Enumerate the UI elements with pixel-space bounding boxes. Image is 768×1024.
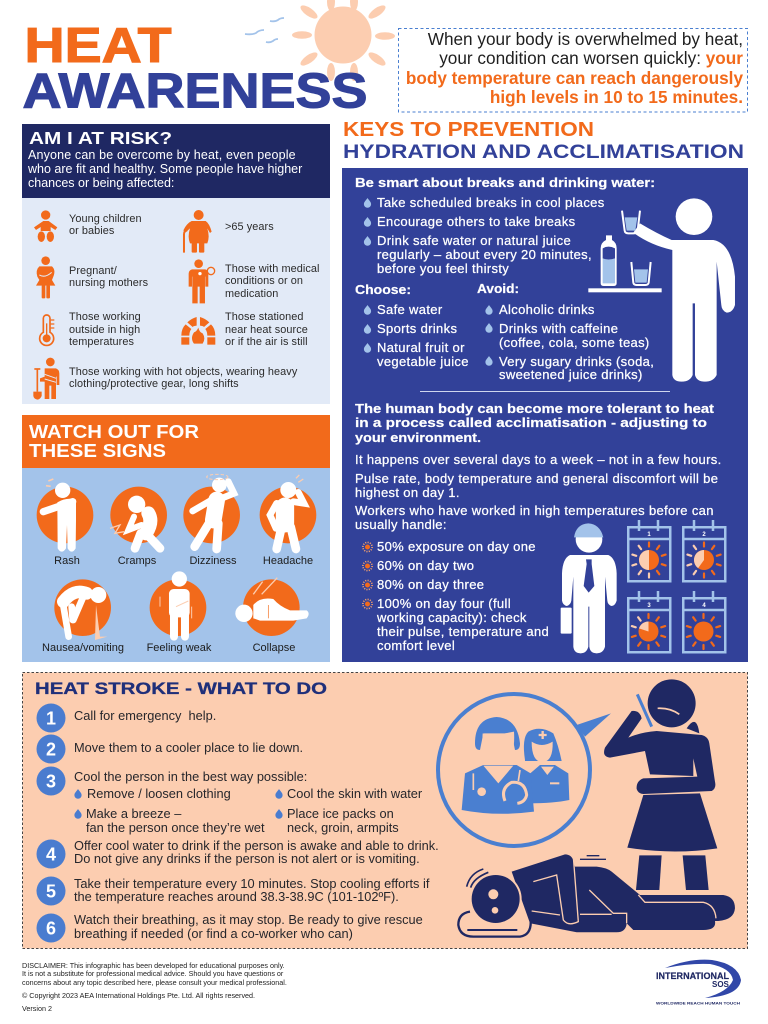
steps text xyxy=(74,708,439,941)
list: exposure by day: their pulse, temperature and xyxy=(377,624,549,639)
callout: When your body is overwhelmed by heat, xyxy=(428,29,743,49)
panel: am I at risk xyxy=(22,124,330,404)
text: age groups: or babies xyxy=(69,225,115,237)
list: breaks and water: Encourage others to take breaks xyxy=(377,214,576,229)
text: outside and heat source: Those working xyxy=(69,311,141,323)
list: exposure by day: 60% on day two xyxy=(377,558,474,573)
sign: collapse xyxy=(235,578,309,654)
sign: collapse: Collapse xyxy=(253,642,295,654)
list: choose: Sports drinks xyxy=(377,321,457,336)
logo: International SOS: INTERNATIONAL xyxy=(656,971,730,981)
icon: thermometer xyxy=(40,315,54,345)
text: acclimatisation: The human body can become more tolerant to heat xyxy=(355,402,715,416)
sign: dizziness: Dizziness xyxy=(189,555,237,567)
sign: nausea: Nausea/vomiting xyxy=(42,642,124,654)
sign: cramps: Cramps xyxy=(118,555,157,567)
text: outside and heat source xyxy=(69,311,308,348)
panel: heat stroke xyxy=(22,672,748,948)
text: risk intro: Anyone can be overcome by heat, even people xyxy=(28,148,296,162)
heading: watch out xyxy=(29,422,199,461)
calendar: day 2 xyxy=(683,520,725,581)
icon: nursing mother xyxy=(36,256,55,298)
icon: birds xyxy=(245,18,284,42)
steps text: fan the person once they’re wet xyxy=(86,820,265,835)
list: avoid: Alcoholic drinks xyxy=(499,302,595,317)
text: risk intro: who are fit and healthy. Some people have higher xyxy=(27,162,302,176)
disclaimer: © Copyright 2023 AEA International Holdings Pte. Ltd. All rights reserved. xyxy=(22,991,255,1000)
disclaimer: Version 2 xyxy=(22,1004,52,1013)
panel: watch out for signs xyxy=(22,415,330,662)
heading: watch out: THESE SIGNS xyxy=(29,441,166,461)
text: pregnant and medical conditions xyxy=(69,263,319,300)
icon: man drinking water xyxy=(588,198,735,382)
illustration: collapsed person xyxy=(458,854,735,937)
calendar: day 1: 1 xyxy=(647,532,651,538)
heading: am I at risk: AM I AT RISK? xyxy=(29,128,172,148)
list: choose: Safe water xyxy=(377,302,443,317)
calendar: day 3 xyxy=(628,591,670,652)
list: breaks and water: regularly – about every 20 minutes, xyxy=(377,247,592,262)
calendar: day 4: 4 xyxy=(702,603,706,609)
sign: dizziness xyxy=(183,474,240,567)
step numbers: 6 xyxy=(46,918,56,938)
text: acclimatisation: in a process called acclimatisation - adjusting to xyxy=(355,416,707,430)
steps text: Remove / loosen clothing xyxy=(87,786,231,801)
text: hot objects: clothing/protective gear, long shifts xyxy=(69,378,239,390)
steps text: breathing if needed (or find a co-worker who can) xyxy=(74,926,353,941)
list: avoid: Drinks with caffeine xyxy=(499,321,618,336)
title: HEAT xyxy=(24,19,172,73)
sign: nausea xyxy=(42,579,124,654)
list: choose: vegetable juice xyxy=(377,354,469,369)
list: avoid: Avoid: xyxy=(477,282,519,296)
sign: rash xyxy=(37,479,93,567)
text: acclimatisation details: highest on day 1. xyxy=(355,485,460,500)
steps text: Do not give any drinks if the person is not alert or is vomiting. xyxy=(74,851,420,866)
list: exposure by day: comfort level xyxy=(377,638,455,653)
callout: body temperature can reach dangerously xyxy=(406,68,743,88)
sign: cramps xyxy=(110,487,167,567)
text: pregnant and medical conditions: medication xyxy=(225,288,278,300)
steps text: Cool the skin with water xyxy=(287,786,423,801)
step numbers: 4 xyxy=(46,844,56,864)
list: avoid: sweetened juice drinks) xyxy=(499,367,643,382)
illustration: speech bubble with medics xyxy=(438,694,611,846)
text: hot objects xyxy=(69,366,298,390)
text: pregnant and medical conditions: nursing mothers xyxy=(69,277,149,289)
text: age groups: >65 years xyxy=(225,221,274,233)
list: breaks and water: Take scheduled breaks in cool places xyxy=(377,195,605,210)
list: avoid xyxy=(477,282,654,382)
steps text: Take their temperature every 10 minutes. Stop cooling efforts if xyxy=(74,876,430,891)
bullets: cooling xyxy=(74,789,283,819)
list: exposure by day: working capacity): check xyxy=(376,610,527,625)
step numbers: 1 xyxy=(46,708,56,728)
sign: headache xyxy=(260,475,316,567)
text: age groups xyxy=(69,213,274,237)
steps text: Cool the person in the best way possible: xyxy=(74,769,307,784)
list: avoid: Very sugary drinks (soda, xyxy=(499,354,654,369)
list: choose xyxy=(355,283,469,369)
icon: person with medical condition xyxy=(189,259,215,303)
sign: headache: Headache xyxy=(263,555,313,567)
calendar: day 2: 2 xyxy=(702,532,706,538)
text: risk intro: chances or being affected: xyxy=(28,176,174,190)
logo: International SOS: SOS xyxy=(712,980,730,989)
text: acclimatisation details: It happens over several days to a week – not in a few hours. xyxy=(355,452,722,467)
sign: feeling weak xyxy=(147,571,212,654)
heading: watch out: WATCH OUT FOR xyxy=(29,422,199,442)
text: outside and heat source: temperatures xyxy=(69,336,134,348)
step numbers: 2 xyxy=(46,740,56,760)
title xyxy=(22,19,368,118)
list: avoid: (coffee, cola, some teas) xyxy=(499,335,650,350)
heading: keys to prevention: KEYS TO PREVENTION xyxy=(343,119,594,141)
icon: elderly person xyxy=(183,210,212,253)
list: exposure by day: 50% exposure on day one xyxy=(377,539,536,554)
list: breaks and water xyxy=(364,195,605,276)
logo: International SOS: WORLDWIDE REACH HUMAN TOUCH xyxy=(656,1002,740,1006)
icon: worker with helmet xyxy=(561,523,617,653)
text: acclimatisation details: Workers who have worked in high temperatures before can xyxy=(355,503,714,518)
steps text: the temperature reaches around 38.3-38.9C (101-102ºF). xyxy=(74,889,399,904)
text: acclimatisation details: Pulse rate, body temperature and general discomfort will be xyxy=(355,471,718,486)
logo: International SOS xyxy=(656,960,741,1006)
callout: your condition can worsen quickly: your xyxy=(439,48,743,68)
step numbers: 5 xyxy=(46,882,56,902)
list: breaks and water: Drink safe water or natural juice xyxy=(377,233,571,248)
text: outside and heat source: Those stationed xyxy=(225,311,304,323)
icon: furnace heat source xyxy=(181,317,215,345)
steps text: neck, groin, armpits xyxy=(287,820,399,835)
sign: feeling weak: Feeling weak xyxy=(147,642,212,654)
heading: keys to prevention: HYDRATION AND ACCLIMATISATION xyxy=(343,141,744,163)
list: exposure by day xyxy=(363,539,549,653)
text: pregnant and medical conditions: Those with medical xyxy=(225,263,319,275)
text: outside and heat source: or if the air is still xyxy=(225,336,308,348)
steps text: Place ice packs on xyxy=(287,806,394,821)
step numbers xyxy=(36,704,66,942)
steps text: Call for emergency help. xyxy=(74,708,216,723)
steps text: Watch their breathing, as it may stop. Be ready to give rescue xyxy=(74,912,423,927)
icon: baby xyxy=(34,210,57,242)
panel: prevention xyxy=(342,168,748,662)
heading: heat stroke: HEAT STROKE - WHAT TO DO xyxy=(35,679,327,698)
text: pregnant and medical conditions: conditions or on xyxy=(225,275,303,287)
disclaimer: concerns about any topic described here, please consult your medical professional. xyxy=(22,978,287,987)
icon: sun xyxy=(292,0,395,81)
list: breaks and water: before you feel thirsty xyxy=(377,261,509,276)
steps text: Make a breeze – xyxy=(86,806,182,821)
sign: rash: Rash xyxy=(54,555,80,567)
calendar: day 1 xyxy=(628,520,670,581)
text: hot objects: Those working with hot objects, wearing heavy xyxy=(69,366,298,378)
disclaimer: DISCLAIMER: This infographic has been developed for educational purposes only. xyxy=(22,961,285,970)
callout xyxy=(398,28,748,112)
callout: high levels in 10 to 15 minutes. xyxy=(490,87,743,107)
list: exposure by day: 100% on day four (full xyxy=(377,596,511,611)
text: acclimatisation: your environment. xyxy=(355,431,481,445)
step numbers: 3 xyxy=(46,772,56,792)
list: exposure by day: 80% on day three xyxy=(377,577,484,592)
icon: worker with shovel xyxy=(33,358,59,400)
text: age groups: Young children xyxy=(69,213,142,225)
text: pregnant and medical conditions: Pregnant/ xyxy=(69,265,118,277)
title: AWARENESS xyxy=(22,64,368,118)
text: outside and heat source: near heat source xyxy=(225,324,308,336)
text: outside and heat source: outside in high xyxy=(69,324,140,336)
text: breaks heading: Be smart about breaks and drinking water: xyxy=(355,176,655,190)
disclaimer: It is not a substitute for professional medical advice. Should you have questions or xyxy=(22,969,284,978)
illustration: woman on phone xyxy=(604,679,717,890)
calendar: day 3: 3 xyxy=(647,603,651,609)
text: risk intro xyxy=(27,148,302,190)
text: acclimatisation details: usually handle: xyxy=(355,517,447,532)
text: acclimatisation xyxy=(355,402,715,445)
text: acclimatisation details xyxy=(355,452,722,532)
list: choose: Choose: xyxy=(355,283,411,297)
heading: keys to prevention xyxy=(343,119,744,163)
list: choose: Natural fruit or xyxy=(377,340,465,355)
disclaimer xyxy=(22,961,287,1013)
steps text: Move them to a cooler place to lie down. xyxy=(74,740,303,755)
steps text: Offer cool water to drink if the person is awake and able to drink. xyxy=(74,838,439,853)
calendar: day 4 xyxy=(683,591,725,652)
